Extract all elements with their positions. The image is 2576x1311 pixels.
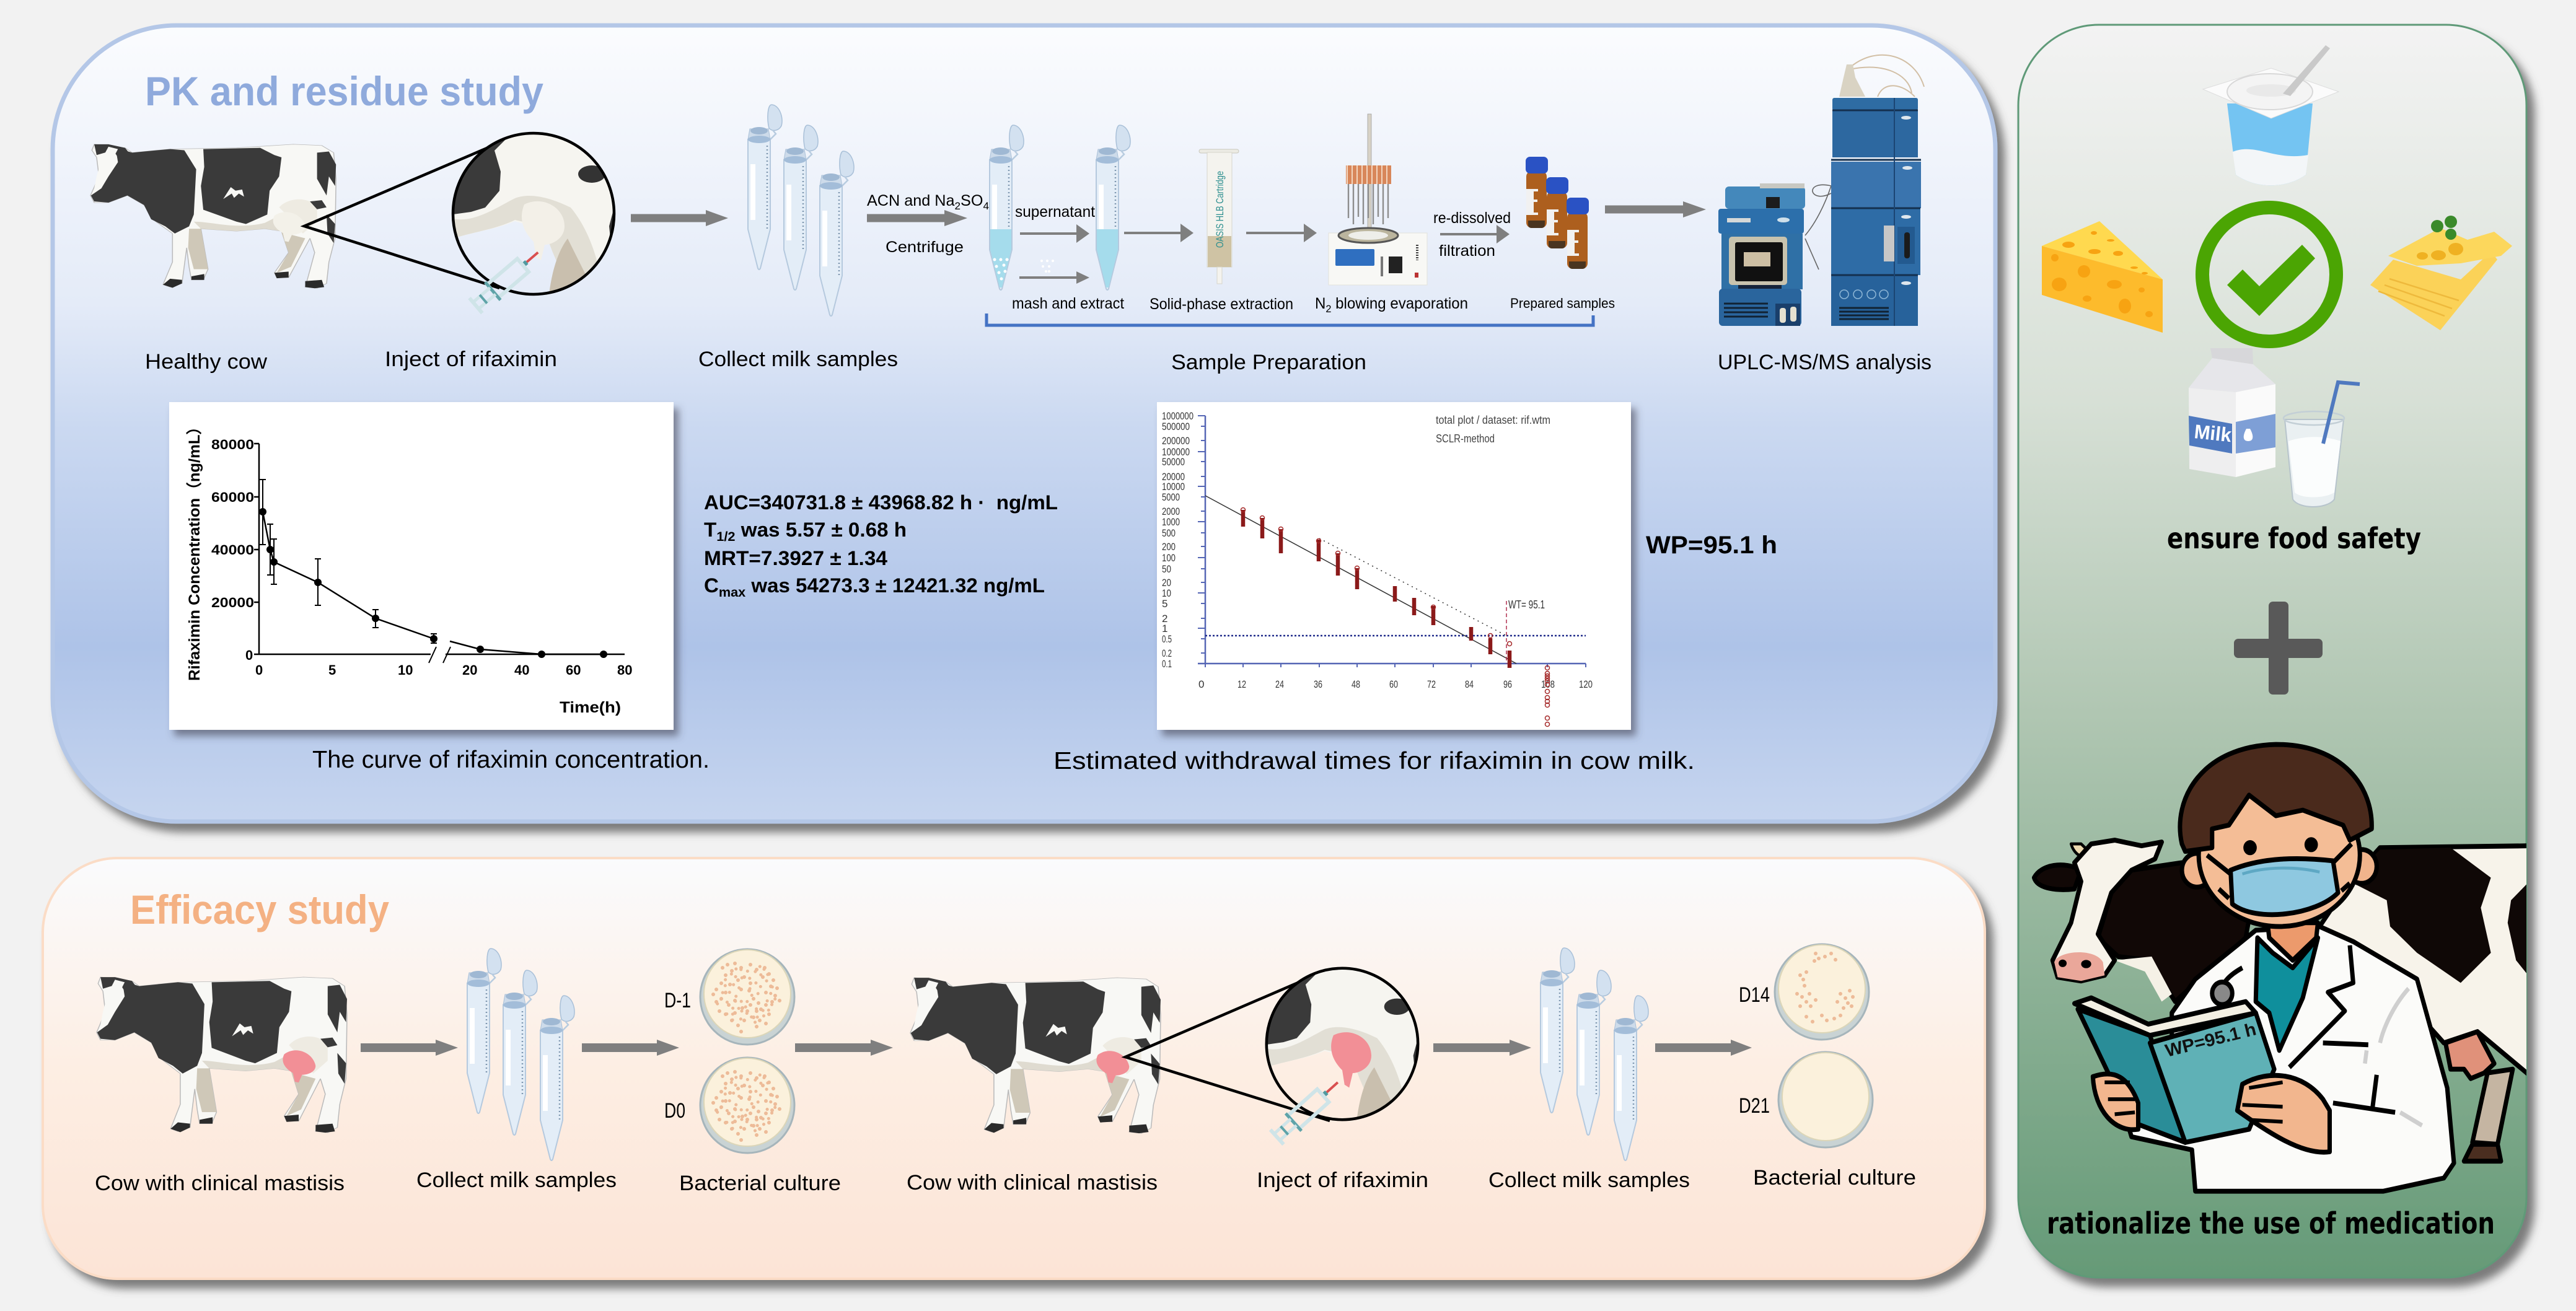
label: Bacterial culture: Bacterial culture bbox=[1753, 1166, 1916, 1190]
chart: withdrawal time regression: 20000 bbox=[1162, 471, 1185, 483]
label: D21: D21 bbox=[1739, 1094, 1770, 1118]
icon: precipitate dots bbox=[1042, 261, 1053, 271]
chart: withdrawal time regression: 0.5 bbox=[1162, 633, 1172, 645]
chart: rifaximin concentration curve: 0 bbox=[255, 662, 263, 678]
zoom lines to udder bbox=[1125, 976, 1330, 1121]
chart: withdrawal time regression: 5 bbox=[1162, 598, 1167, 610]
bracket: sample preparation bbox=[987, 314, 1593, 325]
icon: cow with mastitis, treatment bbox=[910, 978, 1161, 1133]
label: ACN and Na2SO4: ACN and Na bbox=[867, 192, 954, 209]
icon: milk carton and glass: Milk bbox=[2193, 420, 2233, 446]
chart: withdrawal time regression: 100000 bbox=[1162, 446, 1190, 458]
panel background bbox=[53, 25, 1995, 822]
label: D14: D14 bbox=[1739, 983, 1770, 1007]
arrow bbox=[1124, 224, 1193, 242]
chart: withdrawal time regression: 0.2 bbox=[1162, 647, 1172, 659]
chart: rifaximin concentration curve: 10 bbox=[398, 662, 413, 678]
chart: rifaximin concentration curve: 60000 bbox=[211, 489, 254, 505]
icon: healthy cow bbox=[90, 144, 336, 288]
chart: withdrawal time regression: 1 bbox=[1162, 623, 1167, 634]
chart: rifaximin concentration curve: 60 bbox=[566, 662, 581, 678]
chart: withdrawal time regression: SCLR-method bbox=[1436, 432, 1495, 445]
caption: concentration curve: The curve of rifaximin concentration. bbox=[312, 747, 710, 773]
text block: PK parameters: was 5.57 ± 0.68 h bbox=[736, 519, 907, 541]
arrow bbox=[1655, 1040, 1752, 1056]
value: WP=95.1 h: WP=95.1 h bbox=[1646, 532, 1777, 559]
icon: UPLC-MS/MS instrument bbox=[1718, 55, 1924, 326]
heading: Efficacy study: Efficacy study bbox=[130, 887, 389, 932]
chart: rifaximin concentration curve: 80000 bbox=[211, 437, 254, 452]
icon: nitrogen evaporator bbox=[1329, 114, 1427, 285]
chart: withdrawal time regression: 12 bbox=[1237, 678, 1246, 690]
arrow: mash bbox=[1019, 271, 1089, 284]
chart: withdrawal time regression: 96 bbox=[1503, 678, 1512, 690]
label: Cow with clinical mastisis: Cow with clinical mastisis bbox=[95, 1172, 345, 1195]
arrow bbox=[795, 1040, 893, 1056]
chart: withdrawal time regression: 0.1 bbox=[1162, 658, 1172, 670]
label: Cow with clinical mastisis: Cow with clinical mastisis bbox=[907, 1171, 1158, 1195]
text block: PK parameters: was 54273.3 ± 12421.32 ng/mL bbox=[745, 574, 1045, 597]
panel background bbox=[2018, 25, 2526, 1278]
chart: withdrawal time regression: 1000000 bbox=[1162, 410, 1193, 422]
chart: withdrawal time regression: 0 bbox=[1198, 678, 1204, 690]
book text: WP=95.1 h: WP=95.1 h bbox=[2163, 1019, 2258, 1061]
text block: PK parameters: C bbox=[704, 574, 718, 597]
label: Healthy cow: Healthy cow bbox=[145, 350, 267, 374]
chart: withdrawal time regression: 500 bbox=[1162, 527, 1176, 539]
arrow bbox=[1605, 201, 1706, 217]
text block: PK parameters: T bbox=[704, 519, 716, 541]
label: supernatant: supernatant bbox=[1015, 203, 1095, 221]
book bbox=[2075, 998, 2274, 1142]
icon: cow with mastitis bbox=[97, 977, 347, 1133]
chart: rifaximin concentration curve: 0 bbox=[245, 647, 253, 663]
label: D0: D0 bbox=[664, 1099, 685, 1123]
face bbox=[2180, 745, 2376, 926]
stethoscope bbox=[2212, 968, 2243, 1004]
text block: PK parameters bbox=[704, 491, 1058, 600]
label: Bacterial culture: Bacterial culture bbox=[679, 1172, 841, 1195]
arrow bbox=[631, 210, 728, 226]
chart: rifaximin concentration curve: 40000 bbox=[211, 542, 254, 558]
chart: rifaximin concentration curve: 20000 bbox=[211, 595, 254, 610]
arrow bbox=[867, 210, 967, 226]
text block: PK parameters: max bbox=[719, 585, 746, 600]
label: N2 blowing evaporation: N bbox=[1315, 295, 1326, 312]
chart: withdrawal time regression: 50000 bbox=[1162, 456, 1185, 468]
chart: withdrawal time regression: 5000 bbox=[1162, 491, 1180, 503]
icon: milk sample tubes bbox=[748, 105, 854, 316]
panel: Efficacy study bbox=[43, 858, 1985, 1279]
text block: PK parameters: 1/2 bbox=[716, 530, 736, 544]
chart: rifaximin concentration curve bbox=[169, 402, 674, 730]
icon: cheese wedge bbox=[2042, 221, 2163, 333]
icon: SPE cartridge bbox=[1199, 149, 1239, 284]
cow head bbox=[2034, 840, 2249, 1002]
chart: rifaximin concentration curve: Time(h) bbox=[560, 699, 621, 716]
cow body bbox=[2300, 846, 2531, 1161]
icon: milk sample tubes bbox=[467, 949, 574, 1160]
chart: withdrawal time regression: 2000 bbox=[1162, 506, 1180, 517]
chart: rifaximin concentration curve: 20 bbox=[462, 662, 477, 678]
label: D-1: D-1 bbox=[664, 989, 691, 1012]
arrow bbox=[361, 1040, 458, 1056]
chart: withdrawal time regression: 200 bbox=[1162, 541, 1176, 553]
chart: withdrawal time regression: WT= 95.1 bbox=[1508, 598, 1545, 611]
chart: withdrawal time regression: 36 bbox=[1314, 678, 1322, 690]
illustration: veterinarian with cow bbox=[2034, 745, 2531, 1191]
label: ensure food safety: ensure food safety bbox=[2167, 522, 2421, 555]
label: ACN and Na2SO4: 4 bbox=[983, 200, 989, 212]
chart: withdrawal time regression: 2 bbox=[1162, 613, 1167, 625]
chart: rifaximin concentration curve: 5 bbox=[328, 662, 336, 678]
icon: milk sample tubes bbox=[1541, 948, 1648, 1160]
arrow bbox=[1246, 224, 1317, 242]
icon: magnified inflamed udder bbox=[1267, 968, 1418, 1120]
label: re-dissolved: re-dissolved bbox=[1433, 209, 1511, 227]
chart: withdrawal time regression: 24 bbox=[1275, 678, 1284, 690]
icon: prepared sample vials bbox=[1526, 157, 1589, 269]
text block: PK parameters: AUC=340731.8 ± 43968.82 h · ng/mL bbox=[704, 491, 1058, 514]
label: UPLC-MS/MS analysis: UPLC-MS/MS analysis bbox=[1718, 351, 1932, 374]
chart: withdrawal time regression: 48 bbox=[1352, 678, 1360, 690]
icon: milk carton and glass bbox=[2189, 348, 2360, 507]
icon: green check mark bbox=[2202, 208, 2336, 341]
arrow: supernatant bbox=[1020, 224, 1089, 243]
panel: outcomes bbox=[2018, 25, 2531, 1278]
icon: cheese slices bbox=[2370, 216, 2512, 330]
coat bbox=[2128, 926, 2454, 1191]
chart: rifaximin concentration curve: 40 bbox=[514, 662, 529, 678]
chart: withdrawal time regression: 60 bbox=[1389, 678, 1398, 690]
label: Collect milk samples: Collect milk samples bbox=[698, 348, 898, 371]
chart: withdrawal time regression: 108 bbox=[1541, 678, 1555, 690]
icon: magnified udder bbox=[453, 133, 614, 294]
icon: culture plate D0 bbox=[700, 1058, 794, 1153]
icon: syringe bbox=[468, 243, 546, 315]
label: Centrifuge: Centrifuge bbox=[886, 239, 964, 256]
label: mash and extract: mash and extract bbox=[1012, 295, 1124, 312]
axis title: y: Rifaximin Concentration（ng/mL） bbox=[185, 419, 203, 681]
chart: withdrawal time regression: 200000 bbox=[1162, 435, 1190, 447]
chart: withdrawal time regression: 100 bbox=[1162, 552, 1176, 564]
label: Sample Preparation: Sample Preparation bbox=[1171, 351, 1366, 374]
text block: PK parameters: MRT=7.3927 ± 1.34 bbox=[704, 547, 887, 569]
hands bbox=[2093, 1074, 2329, 1152]
arrow bbox=[1433, 1040, 1531, 1056]
icon: SPE cartridge: OASIS HLB Cartridge bbox=[1214, 171, 1226, 248]
icon: culture plate D-1 bbox=[700, 949, 794, 1045]
chart: rifaximin concentration curve: 80 bbox=[617, 662, 632, 678]
chart: withdrawal time regression: 120 bbox=[1579, 678, 1593, 690]
label: Inject of rifaximin: Inject of rifaximin bbox=[385, 348, 557, 371]
label: Collect milk samples: Collect milk samples bbox=[1488, 1168, 1690, 1192]
heading: PK and residue study: PK and residue study bbox=[145, 68, 543, 114]
icon: supernatant tube bbox=[1096, 125, 1130, 290]
label: Collect milk samples: Collect milk samples bbox=[416, 1168, 617, 1192]
label: Inject of rifaximin: Inject of rifaximin bbox=[1257, 1168, 1428, 1192]
label: N2 blowing evaporation: 2 bbox=[1325, 303, 1331, 315]
chart: withdrawal time regression: 10 bbox=[1162, 587, 1171, 599]
icon: syringe bbox=[1269, 1074, 1346, 1146]
panel background bbox=[43, 858, 1985, 1279]
label: ACN and Na2SO4: 2 bbox=[954, 200, 961, 212]
chart: withdrawal time regression: total plot / dataset: rif.wtm bbox=[1436, 414, 1550, 426]
chart: withdrawal time regression: 20 bbox=[1162, 577, 1171, 589]
zoom lines to udder bbox=[304, 141, 504, 288]
label: filtration: filtration bbox=[1439, 242, 1495, 260]
chart: withdrawal time regression: 10000 bbox=[1162, 481, 1185, 493]
icon: plus sign bbox=[2234, 602, 2323, 695]
chart: withdrawal time regression bbox=[1157, 402, 1631, 730]
chart: withdrawal time regression: 72 bbox=[1427, 678, 1436, 690]
label: Prepared samples: Prepared samples bbox=[1510, 296, 1615, 311]
chart: withdrawal time regression: 84 bbox=[1465, 678, 1474, 690]
panel: PK and residue study bbox=[53, 25, 1995, 822]
chart: withdrawal time regression: 500000 bbox=[1162, 421, 1190, 432]
chart: withdrawal time regression: 1000 bbox=[1162, 516, 1180, 528]
label: ACN and Na2SO4: SO bbox=[961, 192, 983, 209]
arrow bbox=[1440, 225, 1510, 243]
icon: centrifuge tube with sediment bbox=[990, 125, 1024, 290]
icon: yogurt cup bbox=[2203, 45, 2339, 185]
label: N2 blowing evaporation: blowing evaporation bbox=[1331, 295, 1468, 312]
icon: culture plate D21 bbox=[1778, 1052, 1873, 1147]
icon: culture plate D14 bbox=[1775, 944, 1869, 1040]
caption: withdrawal times: Estimated withdrawal times for rifaximin in cow milk. bbox=[1053, 748, 1695, 774]
neck and shirt bbox=[2267, 923, 2318, 960]
chart: withdrawal time regression: 50 bbox=[1162, 563, 1171, 575]
arrow bbox=[582, 1040, 679, 1056]
label: Solid-phase extraction: Solid-phase extraction bbox=[1150, 296, 1293, 313]
